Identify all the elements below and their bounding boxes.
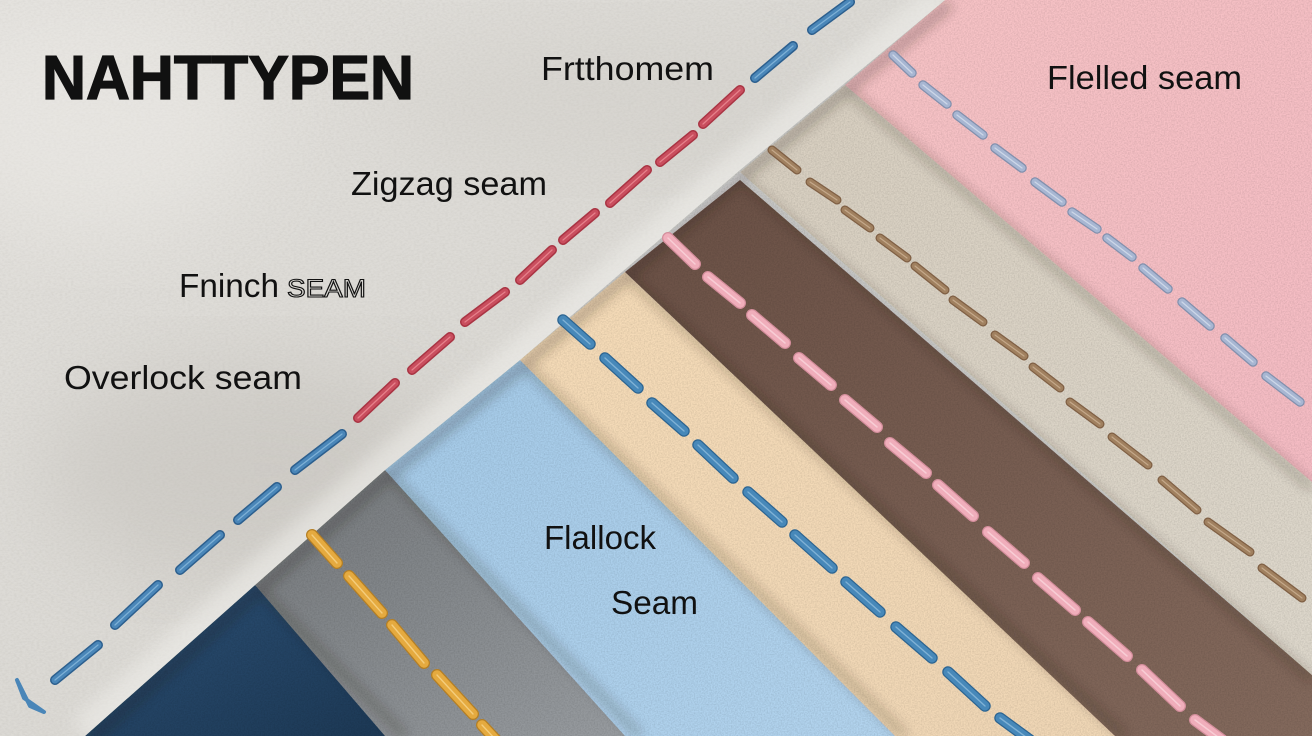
label: Seam: Seam: [611, 584, 698, 621]
panel: stone fabric: [740, 85, 1312, 675]
panel: grey fabric: [255, 470, 640, 736]
label: Fninch seam: Fninch: [179, 267, 279, 304]
seam: red stitches on white: [358, 90, 740, 418]
label: Frtthomem: Frtthomem: [541, 50, 714, 87]
seam: periwinkle stitches on pink: [893, 55, 1300, 402]
panel: cream fabric: [520, 272, 1118, 736]
seam: pink stitches on brown: [668, 238, 1222, 736]
label: Flallock: Flallock: [544, 519, 656, 556]
seam: yellow stitches on grey: [312, 535, 496, 736]
seam: blue stitches on white: [17, 2, 850, 712]
title: NAHTTYPEN: [42, 44, 414, 113]
panel: brown fabric: [625, 180, 1312, 736]
seam: blue stitches on cream: [563, 320, 1030, 736]
panel: navy fabric: [85, 585, 420, 736]
seam: brown stitches on stone: [772, 150, 1302, 598]
label: Fninch seam: SEAM: [287, 275, 366, 303]
panel: light blue fabric: [385, 360, 900, 736]
label: Zigzag seam: Zigzag seam: [351, 165, 547, 202]
label: Overlock seam: Overlock seam: [64, 359, 302, 396]
label: Fninch seam: [179, 267, 366, 304]
panel: white linen fabric: [0, 0, 1000, 736]
panel: pink fabric: [845, 0, 1312, 482]
label: Flelled seam: Flelled seam: [1047, 59, 1242, 96]
